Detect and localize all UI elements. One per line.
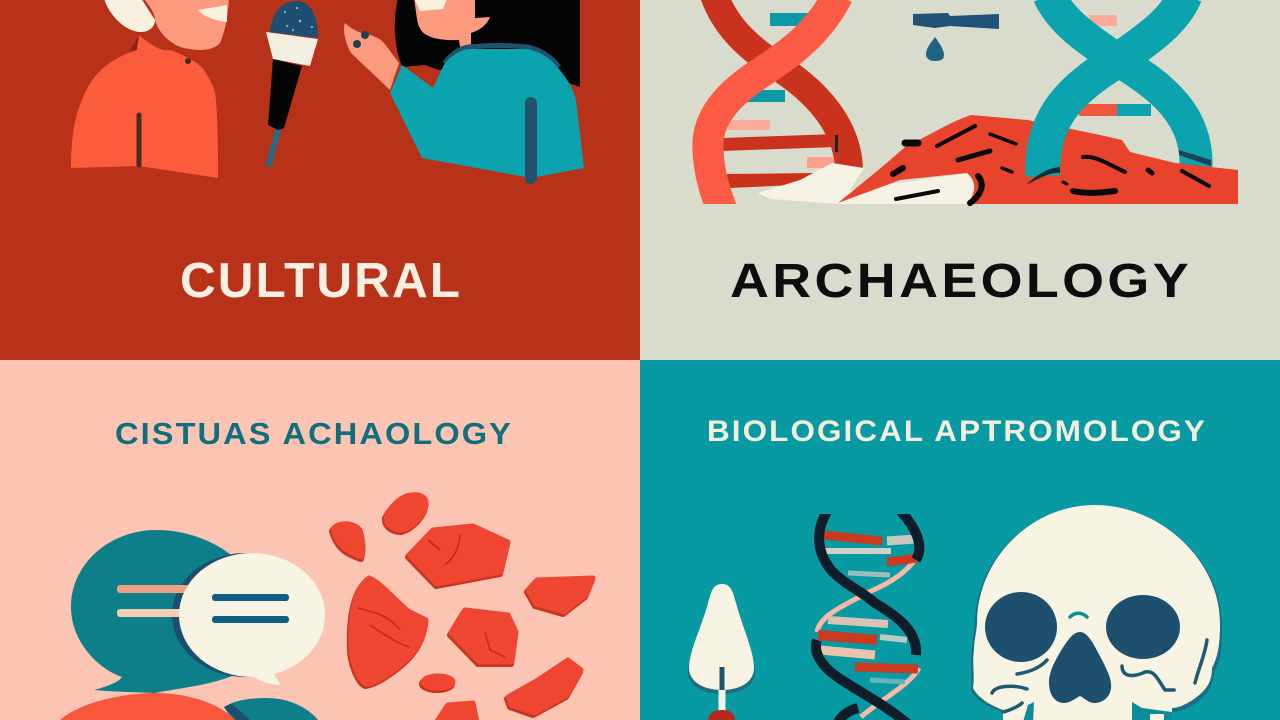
- heading: biological: BIOLOGICAL APTROMOLOGY: [707, 415, 1207, 448]
- panel: linguistic: [0, 360, 640, 720]
- icon: blue tool with droplet: [913, 13, 999, 61]
- heading: cultural: CULTURAL: [180, 254, 462, 308]
- heading: archaeology: ARCHAEOLOGY: [730, 255, 1192, 308]
- panel: cultural: [0, 0, 640, 360]
- icon: speech bubbles: [71, 530, 325, 693]
- heading: linguistic: CISTUAS ACHAOLOGY: [115, 416, 513, 451]
- illustration: woman with black hair: [344, 0, 584, 178]
- illustration: interviewer with white hair: [71, 0, 229, 178]
- illustration: dna helix teal: [1049, 0, 1196, 168]
- illustration: dna helix red: [708, 0, 849, 215]
- illustration: pottery fragments: [332, 495, 593, 720]
- icon: microphone: [266, 1, 318, 164]
- illustration: skull: [971, 505, 1222, 720]
- illustration: excavated dirt mound: [758, 0, 1238, 204]
- icon: trowel: [688, 584, 755, 720]
- panel: biological: [640, 360, 1280, 720]
- panel: archaeology: [692, 0, 1238, 298]
- icon: speakers at bottom: [60, 693, 318, 720]
- illustration: dna helix: [816, 505, 919, 720]
